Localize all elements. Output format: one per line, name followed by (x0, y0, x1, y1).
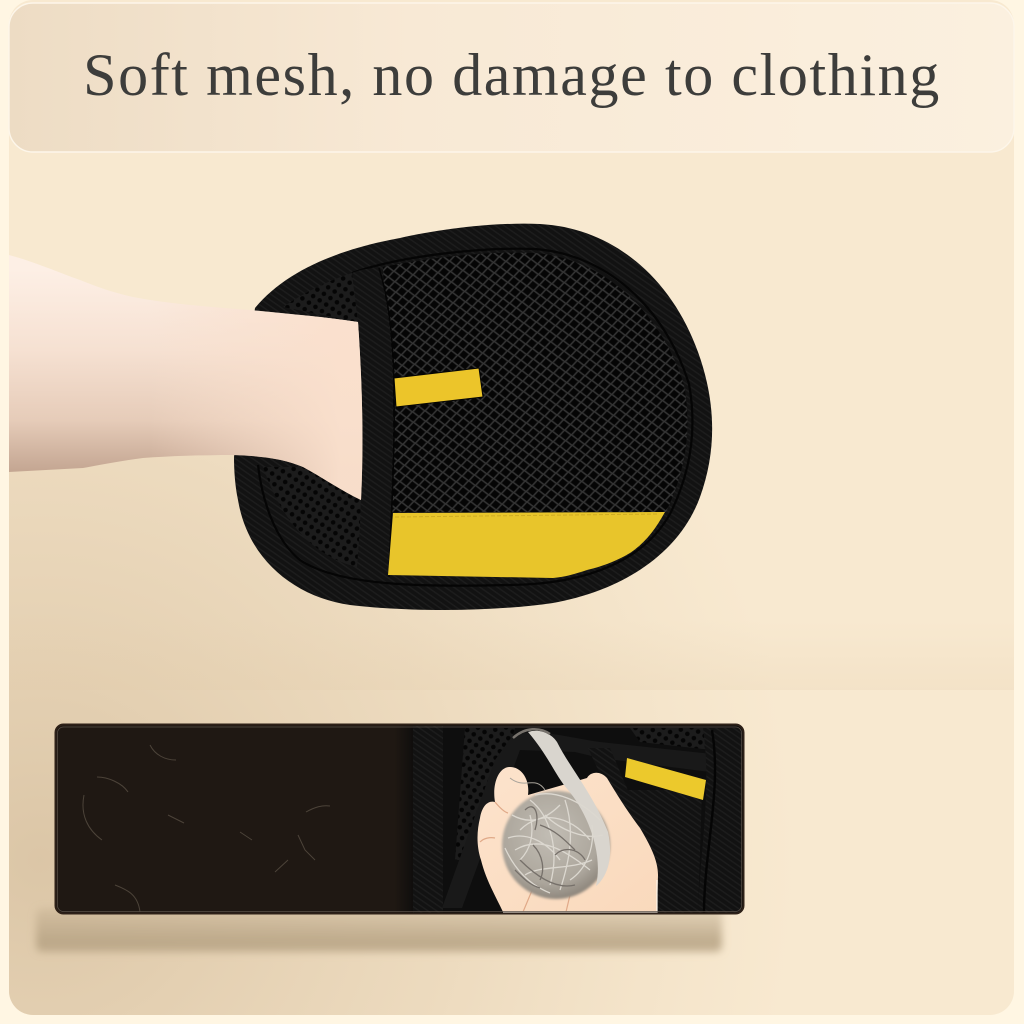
inner seam (258, 249, 692, 586)
mitt close-up (413, 724, 745, 914)
vertical strap (352, 268, 393, 577)
large yellow band (388, 512, 665, 578)
title: Soft mesh, no damage to clothing (83, 42, 941, 108)
hair ball (502, 729, 610, 899)
comparison card (55, 724, 745, 914)
mesh panel (383, 253, 687, 512)
arm (9, 255, 362, 500)
mitt outer binding (234, 224, 712, 610)
title panel (9, 3, 1014, 152)
upper-left mesh (283, 273, 358, 322)
small yellow tab (394, 368, 483, 407)
comparison card shadow (36, 908, 722, 952)
yellow tab (625, 758, 706, 800)
hand (478, 767, 658, 912)
lower-left mesh (263, 467, 362, 567)
card outline (56, 724, 744, 914)
dark fabric panel with hairs (55, 724, 420, 914)
grooming mitt (234, 224, 712, 610)
